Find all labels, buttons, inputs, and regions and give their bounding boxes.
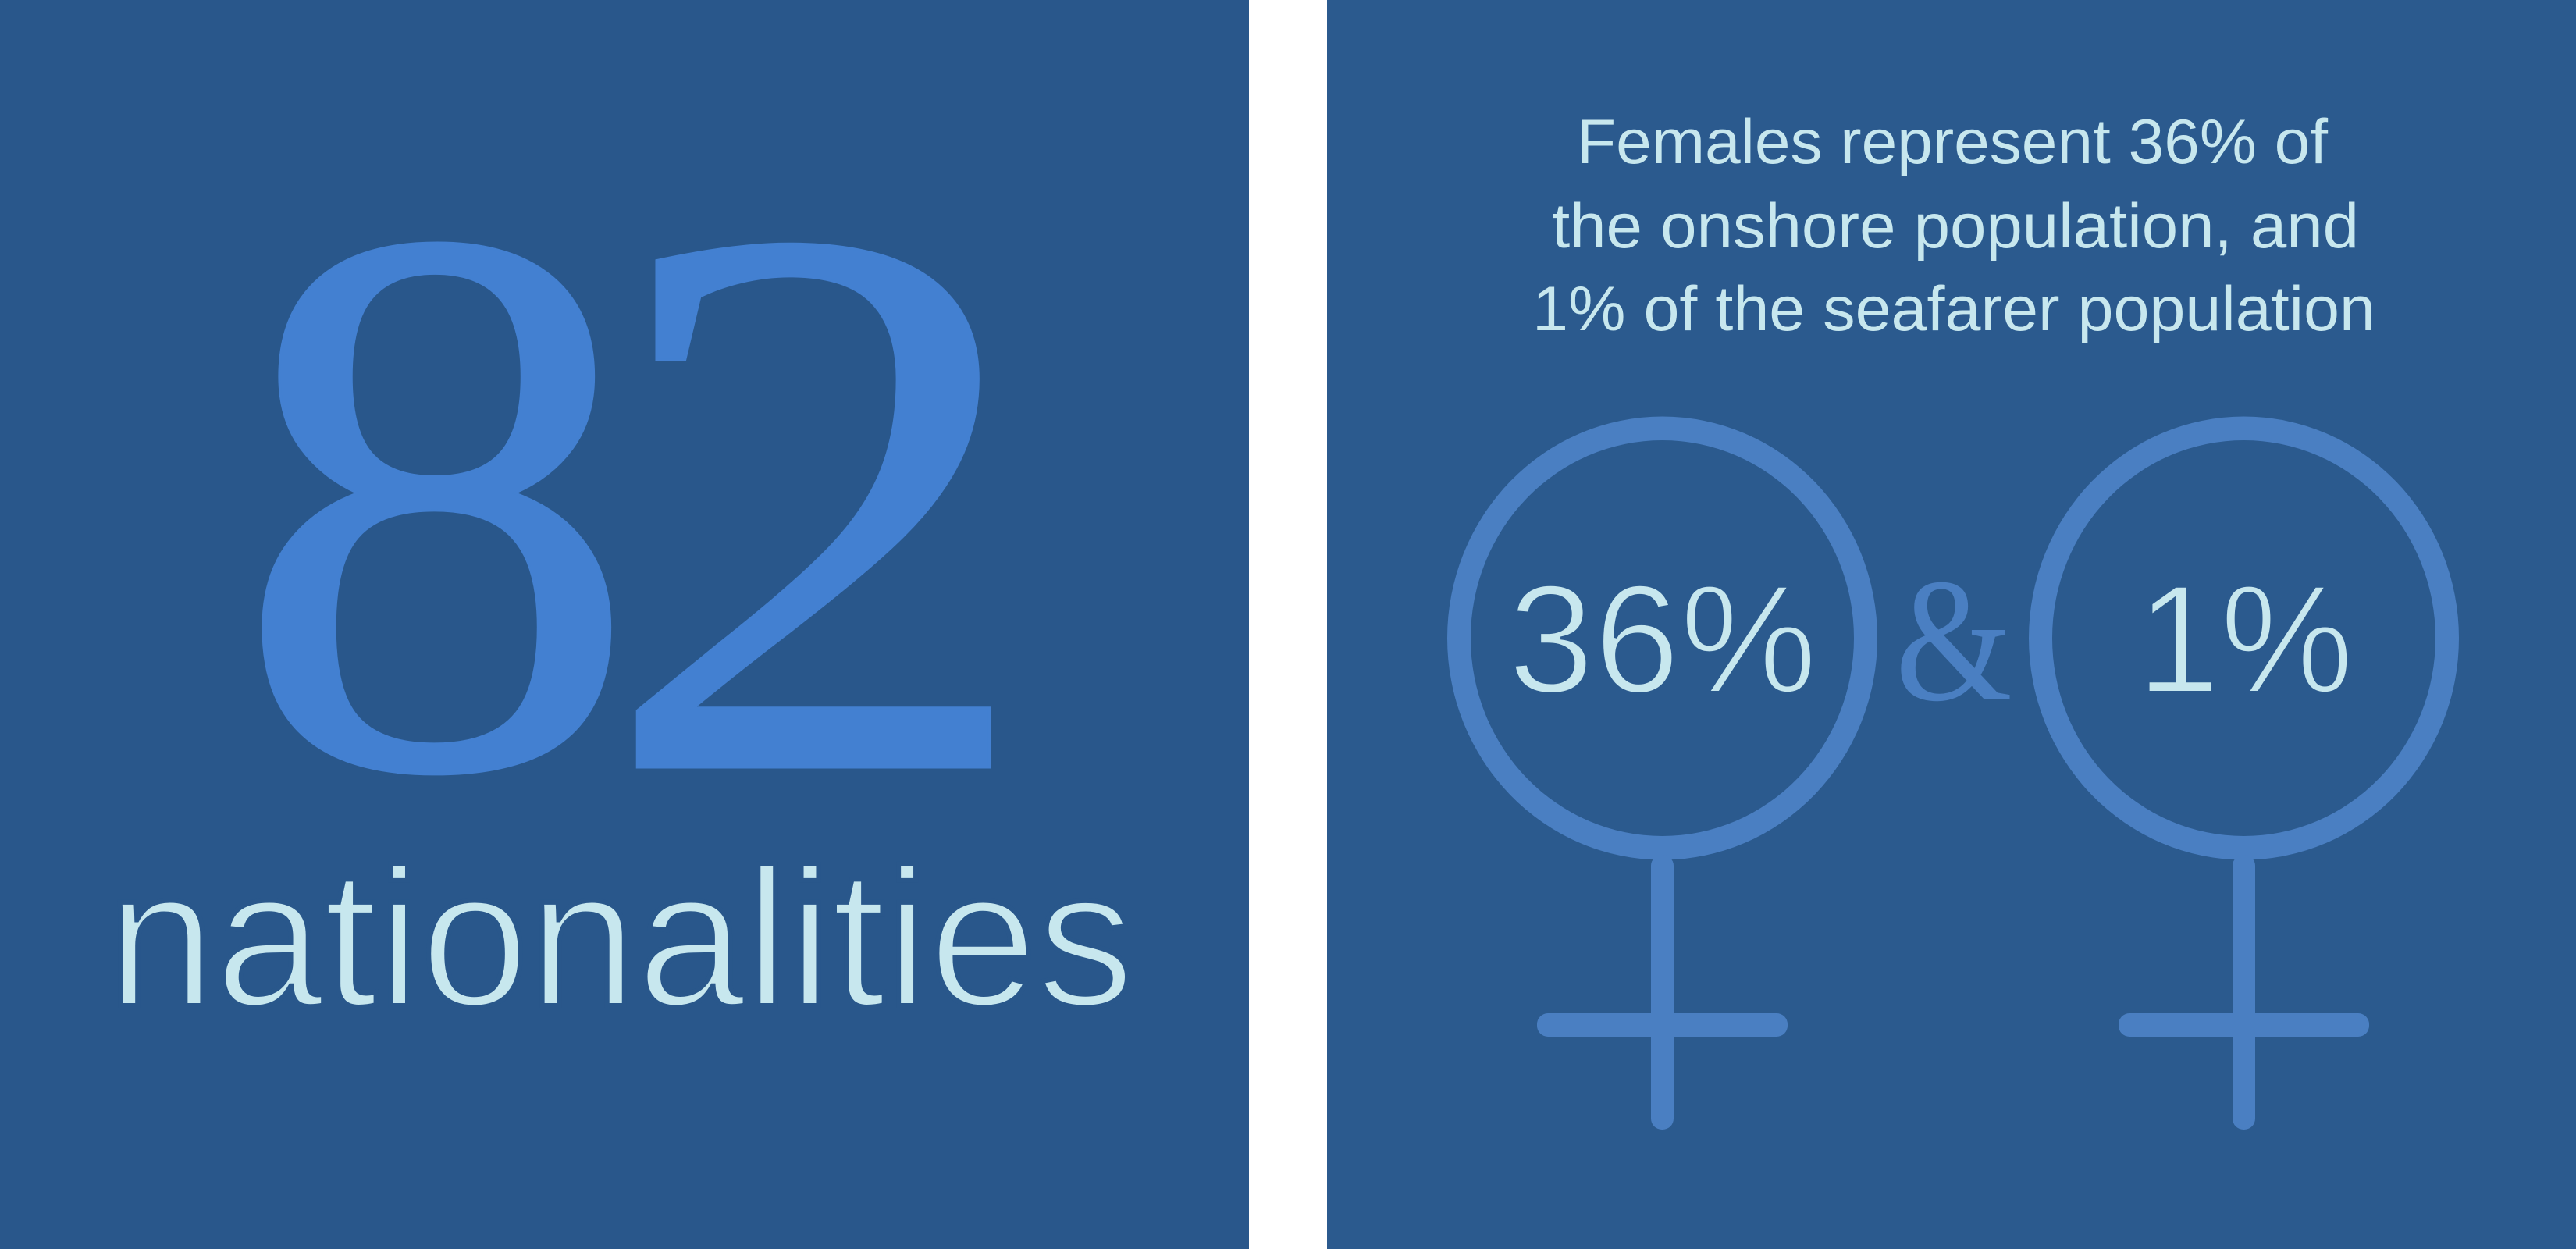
big number: 82: 2	[599, 62, 1038, 939]
big number: 82: 8	[232, 65, 642, 938]
heading text	[1532, 107, 2375, 344]
icon: female symbol 36%	[1447, 416, 1877, 1130]
icon: female symbol 1%	[2029, 416, 2459, 1130]
value: 36%: 36%	[1508, 553, 1817, 725]
big number: 82	[232, 62, 1038, 939]
panel: female population	[1327, 0, 2576, 1249]
value: 1%: 1%	[2137, 553, 2354, 725]
heading text: Females represent 36% of	[1577, 107, 2328, 177]
heading text: 1% of the seafarer population	[1532, 274, 2375, 344]
panel: nationalities	[0, 0, 1249, 1249]
ampersand: &	[1895, 543, 2012, 738]
label: nationalities: nationalities	[107, 829, 1134, 1047]
heading text: the onshore population, and	[1552, 191, 2359, 262]
